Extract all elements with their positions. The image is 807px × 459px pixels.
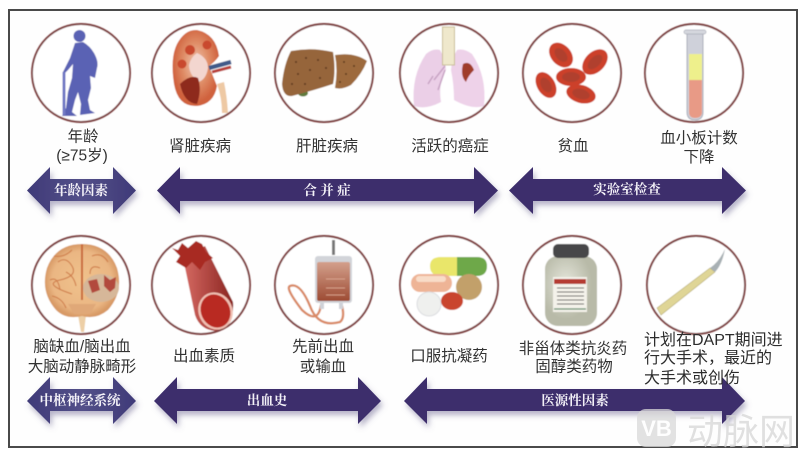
label: low platelets: 血小板计数: [660, 129, 738, 147]
arrow: comorbidities: [157, 167, 498, 214]
label: cerebral: [28, 338, 136, 376]
arrow: bleeding history: 出血史: [247, 392, 288, 408]
arrow: iatrogenic factors: [404, 377, 745, 424]
icon: brain: [32, 236, 130, 334]
label: bleeding diathesis: 出血素质: [173, 347, 235, 365]
icon: kidney: [152, 24, 250, 122]
label: prior bleeding or transfusion: 或输血: [300, 358, 346, 376]
label: low platelets: 下降: [683, 148, 715, 166]
label: low platelets: [660, 129, 738, 166]
label: age: 年龄: [67, 128, 99, 146]
icon: red blood cells: [523, 24, 621, 122]
icon: medicine bottle: [523, 236, 621, 334]
label: liver disease: 肝脏疾病: [296, 137, 358, 155]
arrow: CNS: [27, 377, 136, 424]
label: age: [56, 128, 108, 164]
arrow: age factors: [27, 167, 136, 214]
label: cerebral: 脑缺血/脑出血: [33, 338, 131, 356]
label: NSAIDs and steroids: [519, 340, 627, 376]
icon: blood vessel: [152, 236, 250, 335]
label: cerebral: 大脑动静脉畸形: [28, 358, 136, 376]
arrow: iatrogenic factors: 医源性因素: [541, 392, 609, 408]
watermark: VB: [641, 416, 672, 441]
watermark: 动脉网: [687, 411, 795, 452]
label: prior bleeding or transfusion: 先前出血: [292, 338, 354, 356]
label: planned surgery: 行大手术，最近的: [644, 349, 772, 367]
label: planned surgery: [644, 331, 783, 387]
label: planned surgery: 计划在DAPT期间进: [644, 331, 783, 349]
label: age: (≥75岁): [56, 146, 108, 164]
label: oral anticoagulants: 口服抗凝药: [410, 347, 488, 365]
label: active cancer: 活跃的癌症: [411, 137, 489, 155]
icon: lungs: [400, 24, 498, 122]
icon: pills: [400, 236, 498, 334]
label: NSAIDs and steroids: 固醇类药物: [535, 358, 613, 376]
icon: test tube: [645, 24, 743, 122]
watermark: [637, 409, 795, 452]
arrow: CNS: 中枢神经系统: [40, 392, 122, 408]
icon: elderly person: [32, 24, 130, 122]
label: planned surgery: 大手术或创伤: [644, 369, 740, 387]
label: anemia: 贫血: [557, 137, 589, 155]
icon: scalpel: [647, 236, 745, 334]
arrow: age factors: 年龄因素: [54, 182, 108, 198]
icon: blood bag: [275, 236, 373, 334]
arrow: comorbidities: 合 并 症: [303, 182, 351, 198]
label: NSAIDs and steroids: 非甾体类抗炎药: [519, 340, 627, 358]
icon: liver: [275, 24, 373, 122]
arrow: lab tests: [509, 167, 746, 214]
arrow: bleeding history: [154, 377, 381, 424]
arrow: lab tests: 实验室检查: [593, 181, 661, 197]
label: prior bleeding or transfusion: [292, 338, 354, 376]
label: kidney disease: 肾脏疾病: [169, 137, 231, 155]
